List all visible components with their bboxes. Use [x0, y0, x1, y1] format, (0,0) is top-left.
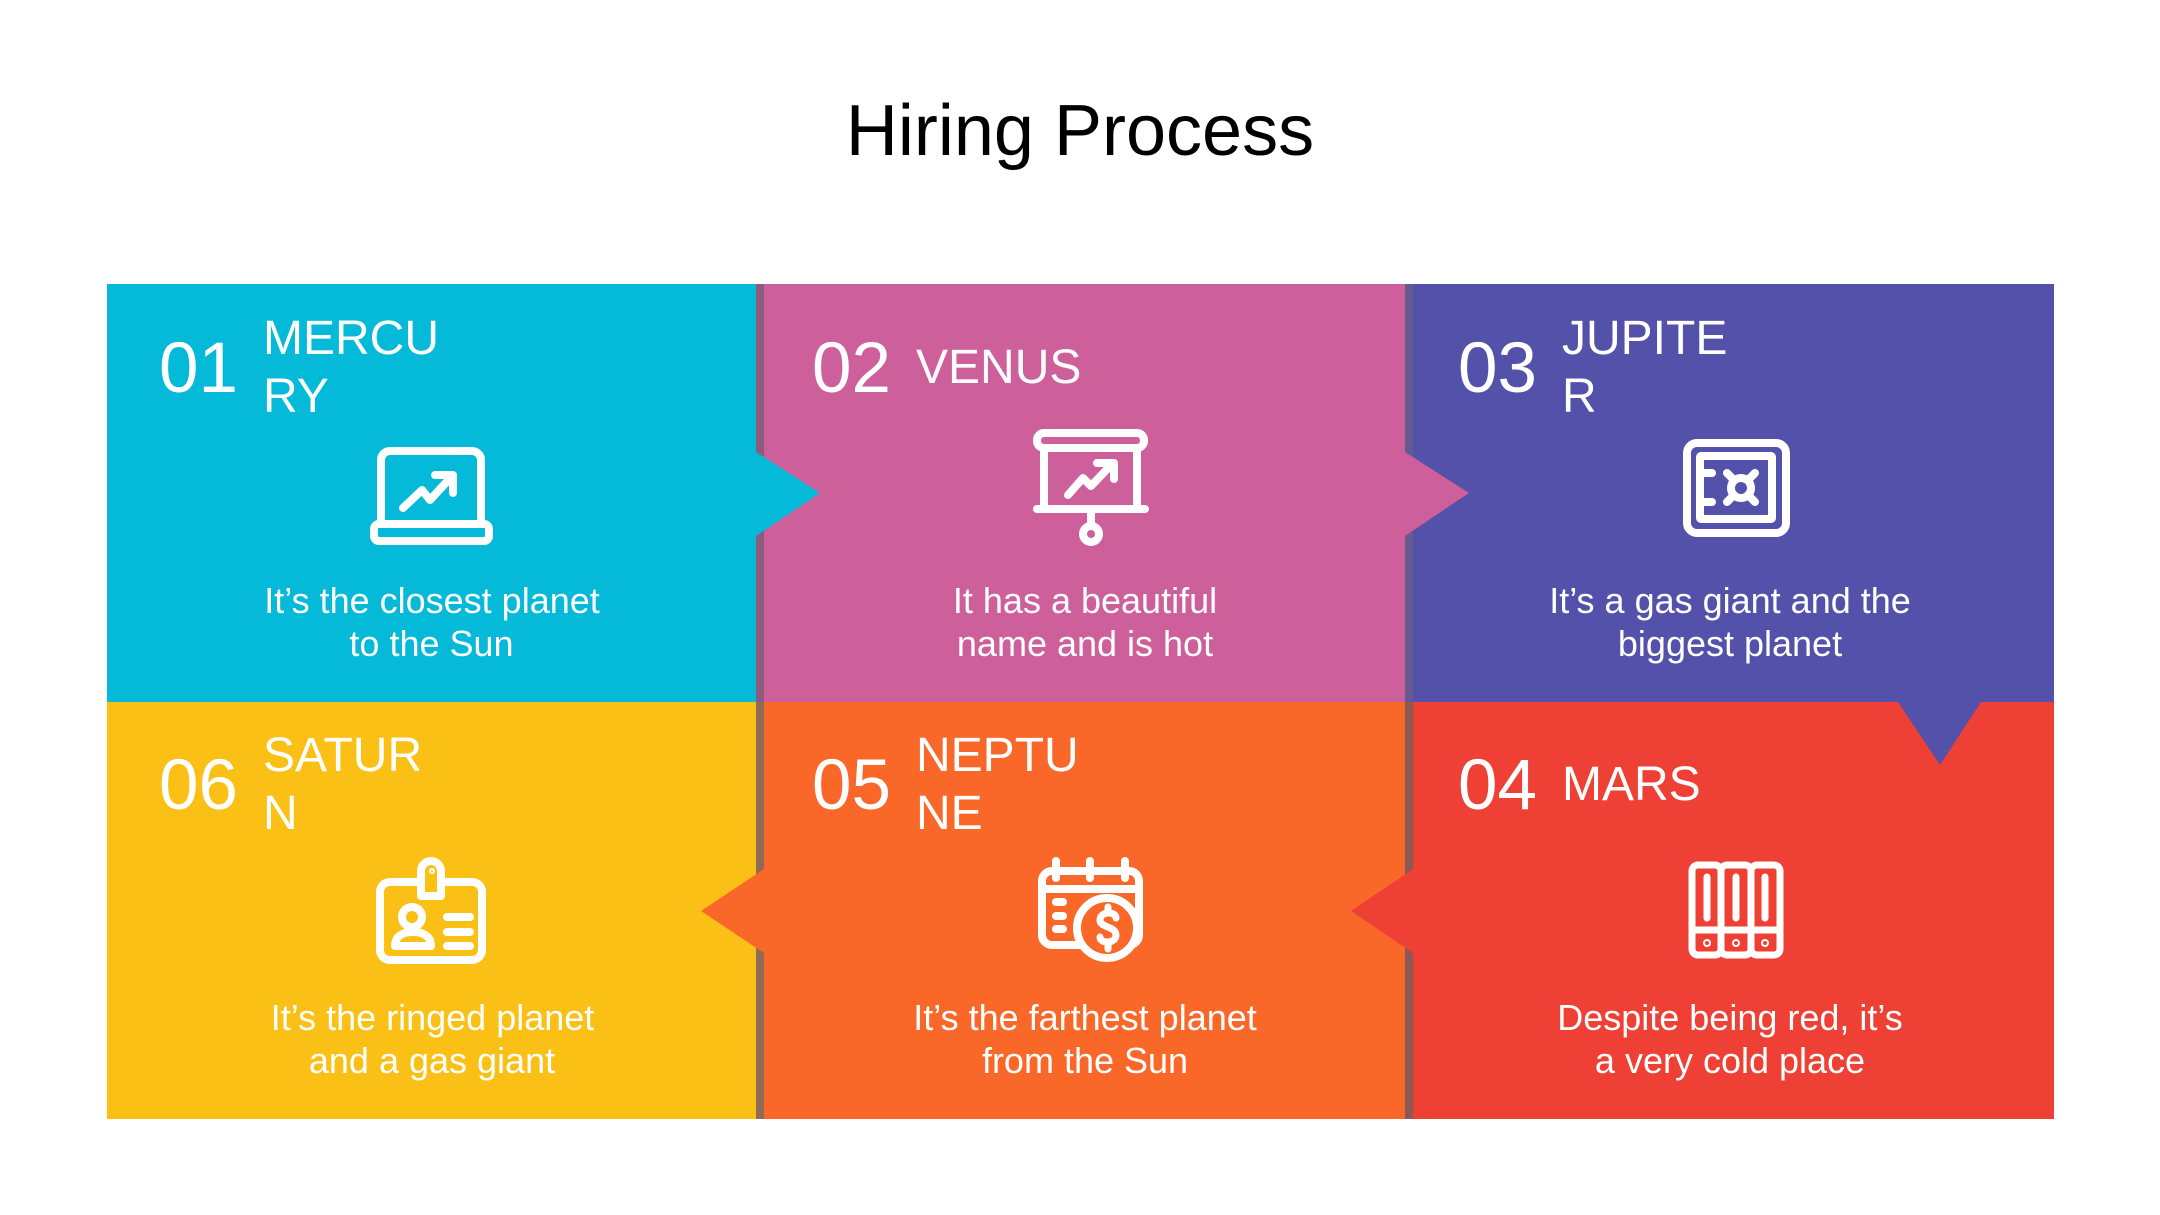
text: 02 description: name and is hot	[957, 623, 1213, 664]
arrow: 02 to 03	[1405, 452, 1469, 536]
icon: safe	[1687, 443, 1786, 533]
text: 03 description: biggest planet	[1618, 623, 1842, 664]
panel: 05 Neptune	[764, 702, 1413, 1119]
heading: Neptune: NEPTU	[916, 729, 1079, 782]
arrow: 04 to 05	[1351, 869, 1413, 953]
icon: id badge	[380, 861, 482, 960]
icon: laptop with chart	[374, 451, 489, 541]
title: Hiring Process	[846, 91, 1314, 171]
number 01: 01	[159, 329, 238, 408]
text: 06 description: and a gas giant	[309, 1040, 555, 1081]
heading: Jupiter: R	[1562, 370, 1597, 423]
heading: Neptune: NE	[916, 787, 983, 840]
number 05: 05	[812, 746, 891, 825]
panel: 04 Mars	[1413, 702, 2054, 1119]
panel: 01 Mercury	[107, 284, 764, 702]
number 06: 06	[159, 746, 238, 825]
text: 01 description: It’s the closest planet	[264, 580, 600, 621]
icon: presentation screen	[1037, 433, 1145, 542]
text: 05 description: It’s the farthest planet	[913, 997, 1257, 1038]
panel: 03 Jupiter	[1413, 284, 2054, 702]
heading: Saturn: SATUR	[263, 729, 422, 782]
heading: Mercury: RY	[263, 370, 329, 423]
icon: calendar with dollar	[1042, 861, 1139, 958]
text: 06 description: It’s the ringed planet	[271, 997, 594, 1038]
number 02: 02	[812, 329, 891, 408]
number 03: 03	[1458, 329, 1537, 408]
heading: Venus: VENUS	[916, 341, 1081, 394]
panel: 02 Venus	[764, 284, 1413, 702]
text: 04 description: a very cold place	[1595, 1040, 1865, 1081]
arrow: 03 to 04	[1898, 702, 1981, 765]
text: 02 description: It has a beautiful	[953, 580, 1217, 621]
text: 05 description: from the Sun	[982, 1040, 1188, 1081]
arrow: 05 to 06	[701, 869, 764, 953]
number 04: 04	[1458, 746, 1537, 825]
panel: 06 Saturn	[107, 702, 764, 1119]
heading: Mars: MARS	[1562, 758, 1701, 811]
heading: Mercury: MERCU	[263, 312, 439, 365]
text: 03 description: It’s a gas giant and the	[1549, 580, 1911, 621]
text: 04 description: Despite being red, it’s	[1557, 997, 1903, 1038]
heading: Saturn: N	[263, 787, 298, 840]
arrow: 01 to 02	[756, 452, 820, 536]
text: 01 description: to the Sun	[349, 623, 514, 664]
heading: Jupiter: JUPITE	[1562, 312, 1727, 365]
icon: binders	[1692, 865, 1780, 955]
